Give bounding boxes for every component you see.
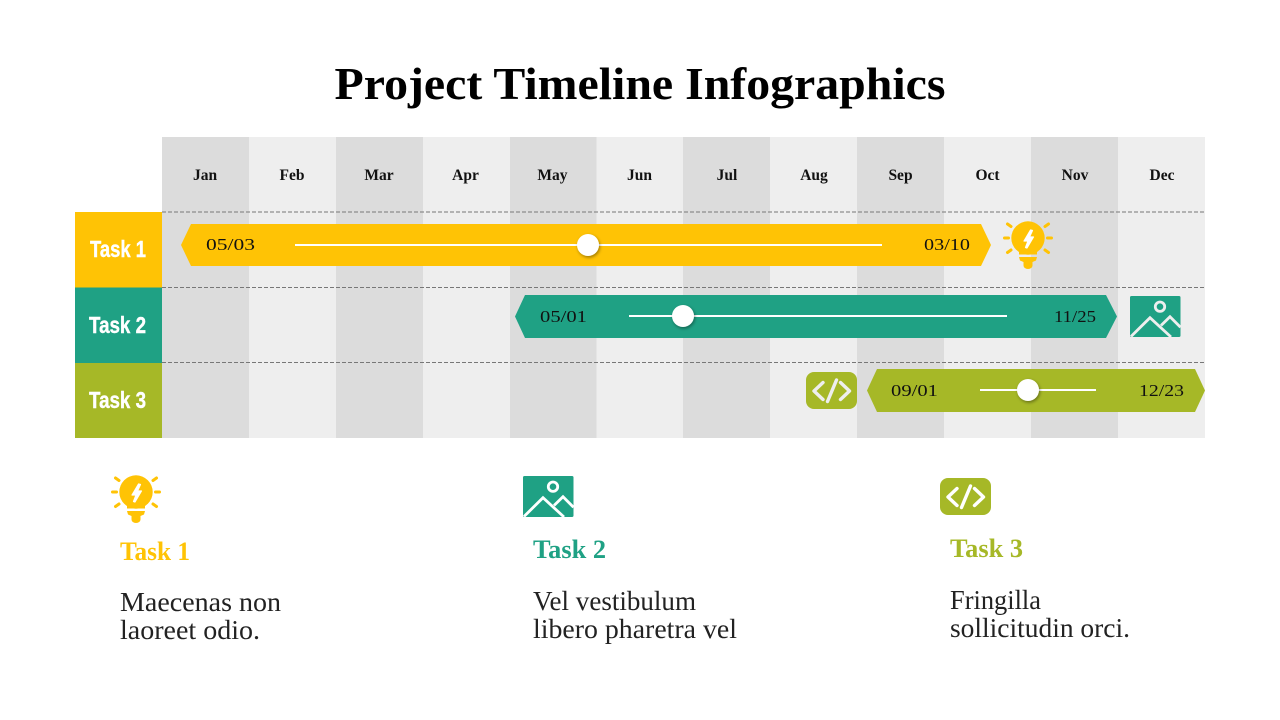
month labels: Jan [193, 167, 217, 184]
title: Project Timeline Infographics [334, 58, 945, 109]
row label: Task 3 [75, 363, 162, 438]
row label: Task 3: Task 3 [89, 387, 146, 413]
month labels: Sep [888, 167, 913, 184]
row label: Task 2 [75, 288, 162, 363]
heading: task 1: Task 1 [120, 537, 190, 566]
month labels [193, 167, 1175, 184]
month labels: May [537, 167, 568, 184]
heading: task 3: Task 3 [950, 534, 1023, 563]
heading: task 2: Task 2 [533, 535, 606, 564]
icon: code [940, 478, 991, 515]
icon: image in chart [1130, 296, 1180, 337]
month labels: Jul [717, 167, 738, 184]
task bar 1 [181, 224, 991, 266]
month labels: Dec [1150, 167, 1175, 184]
month labels: Mar [364, 167, 394, 184]
month labels: Oct [975, 167, 1000, 184]
text: task 2: libero pharetra vel [533, 614, 737, 644]
panel: task 3 description [940, 478, 1130, 643]
month labels: Nov [1062, 167, 1089, 184]
task bar 3 [867, 369, 1205, 412]
panel: task 1 description [112, 475, 282, 645]
text: task 1: Maecenas non [120, 587, 282, 617]
task bar 2 [515, 295, 1117, 338]
timeline grid [162, 137, 1205, 438]
row label: Task 1 [75, 212, 162, 288]
month labels: Feb [280, 167, 304, 184]
icon: light bulb in chart [1004, 221, 1052, 269]
icon: light bulb [112, 475, 160, 523]
month labels: Apr [452, 167, 479, 184]
task bar 3: 12/23 [1139, 381, 1184, 400]
icon: code in chart [806, 372, 857, 409]
text: task 3: sollicitudin orci. [950, 613, 1130, 643]
task bar 1: 05/03 [206, 235, 255, 254]
month labels: Aug [800, 167, 828, 184]
row label: Task 2: Task 2 [89, 312, 146, 338]
month labels: Jun [627, 167, 652, 184]
task bar 2: 05/01 [540, 307, 587, 326]
text: task 2: Vel vestibulum [533, 586, 696, 616]
task bar 2: 11/25 [1054, 307, 1096, 326]
text: task 3: Fringilla [950, 585, 1041, 615]
task bar 1: 03/10 [924, 235, 970, 254]
row label: Task 1: Task 1 [90, 236, 146, 262]
panel: task 2 description [523, 476, 737, 644]
icon: image [523, 476, 574, 517]
task bar 3: 09/01 [891, 381, 938, 400]
text: task 1: laoreet odio. [120, 615, 260, 645]
